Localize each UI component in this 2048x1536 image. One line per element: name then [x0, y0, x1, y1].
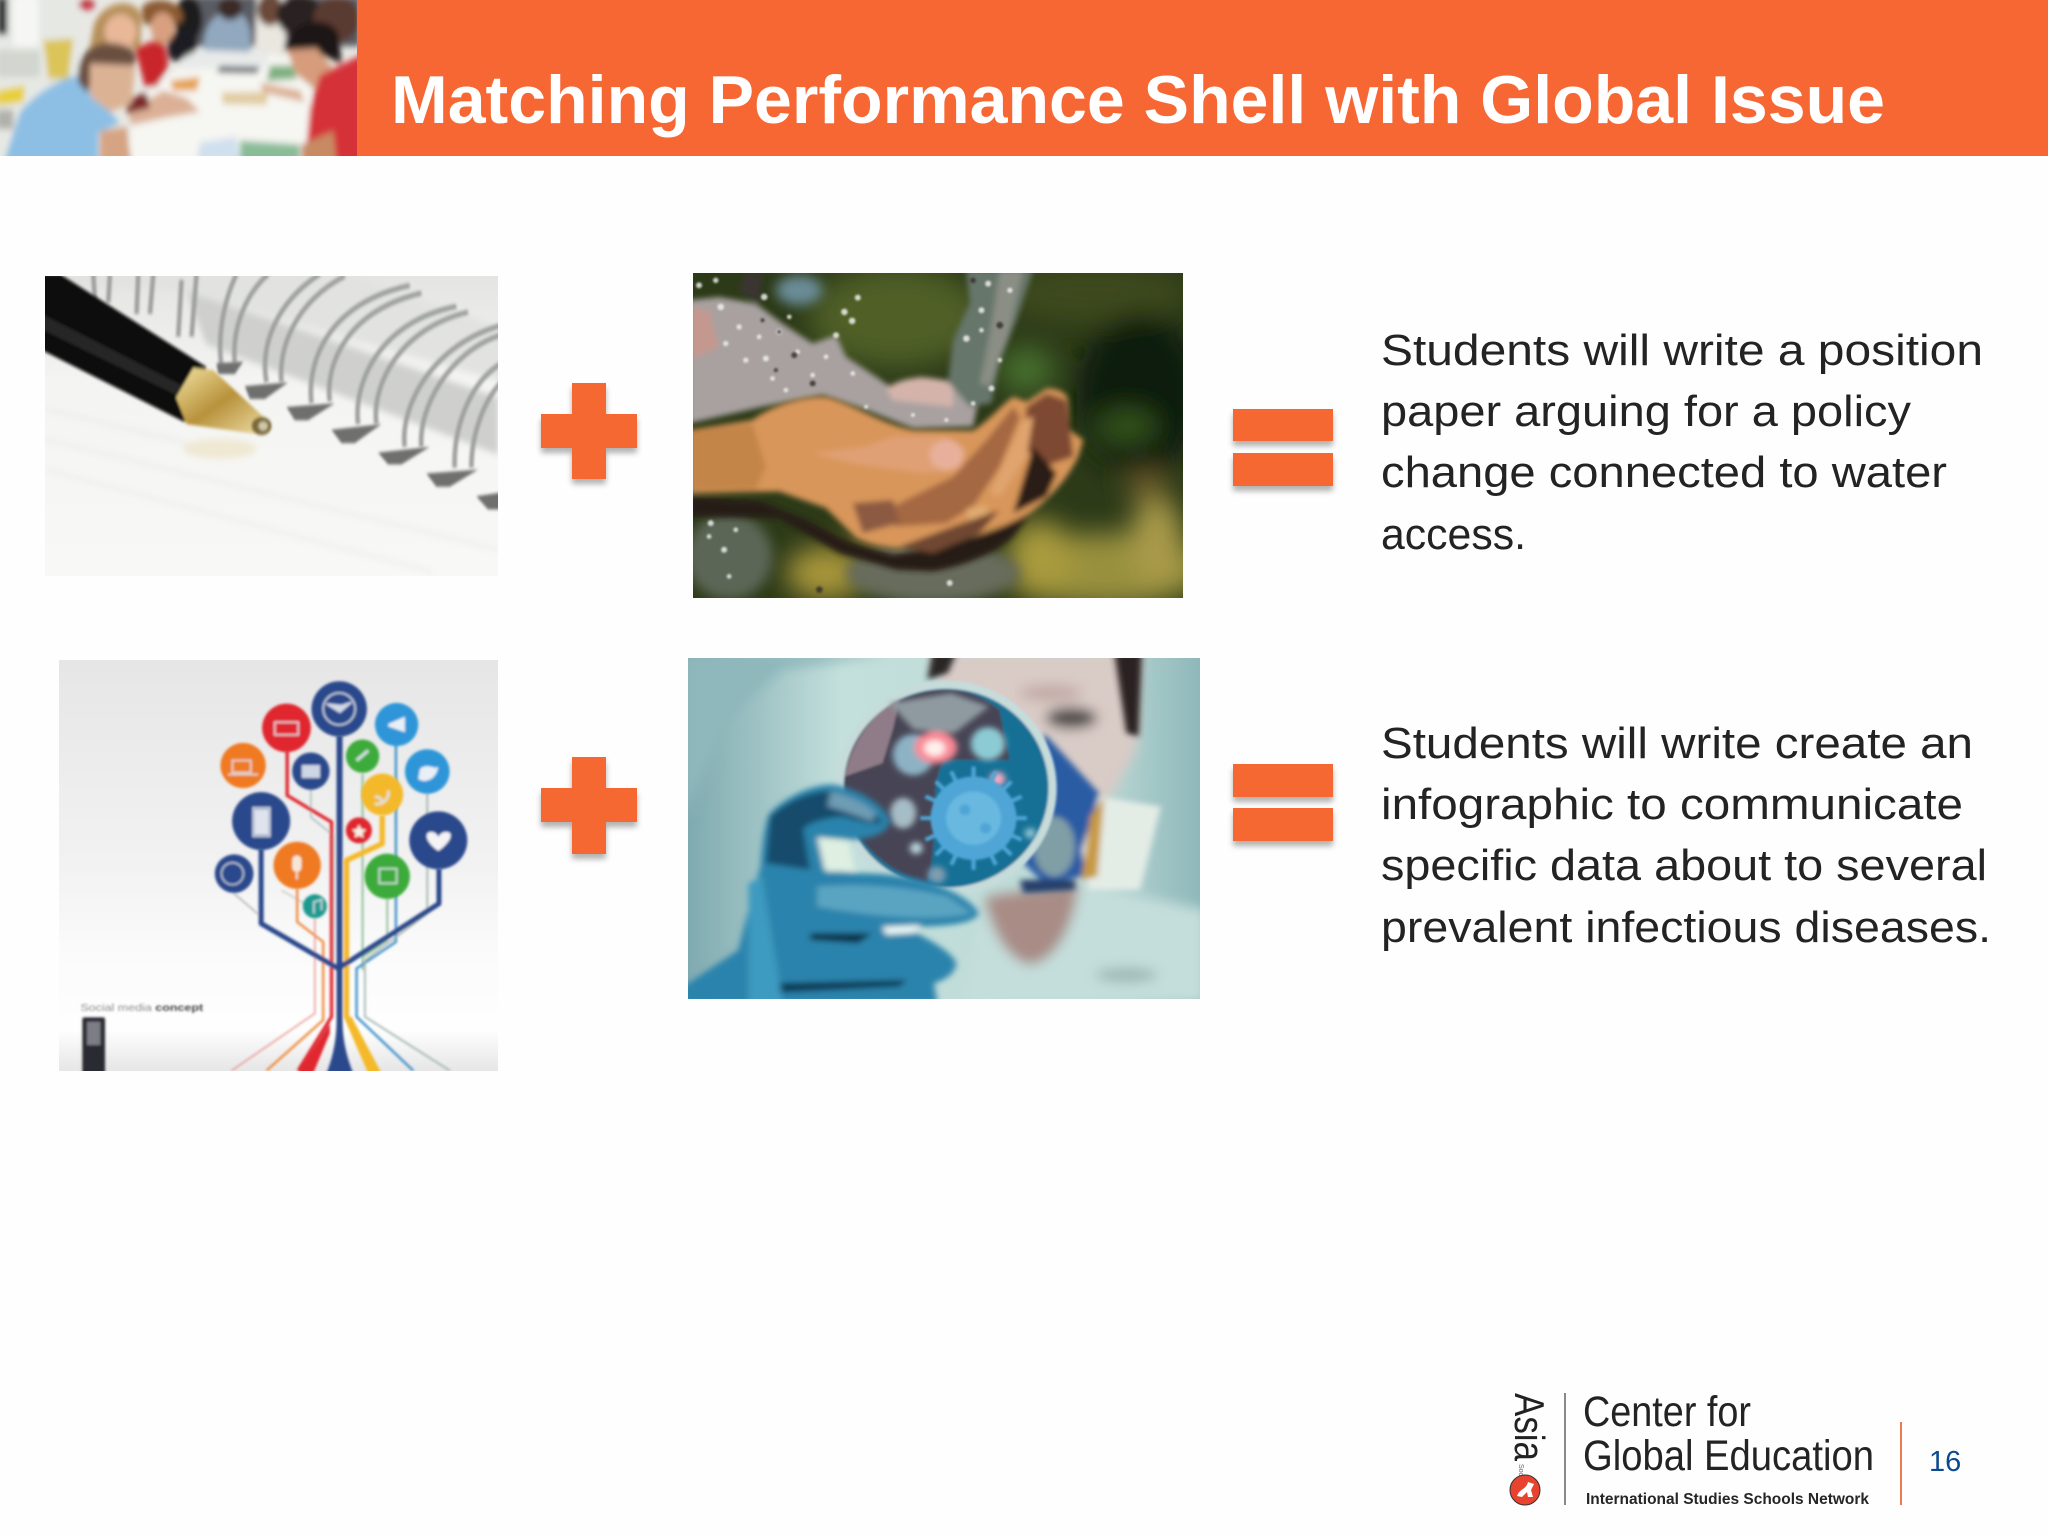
illustration: social media tree: [59, 660, 498, 1071]
text: water access outcome: access.: [1381, 510, 1526, 559]
photo: scientist holding petri dish: [688, 658, 1200, 999]
footer logo: Asia Society Center for Global Education: [1506, 1388, 1874, 1508]
icon: equals sign: [1233, 409, 1333, 486]
icon: book spine: [82, 1017, 105, 1074]
photo: water flowing into cupped hands: [693, 273, 1183, 598]
photo: students working at a table: [0, 0, 357, 156]
photo: pen on spiral notebook: [45, 276, 498, 576]
icon: equals sign: [1233, 764, 1333, 841]
wordmark: Society: Society: [1517, 1464, 1524, 1487]
text: infectious diseases outcome: prevalent infectious diseases.: [1381, 903, 1991, 952]
tagline: International Studies Schools Network: [1586, 1491, 1869, 1508]
wordmark: Center for: Center for: [1583, 1388, 1751, 1436]
icon: red lion seal: [1510, 1475, 1540, 1505]
icon: virus particle: [920, 766, 1027, 870]
icons inside the circles: [221, 693, 397, 914]
caption: social media concept: Social media concept: [80, 1003, 204, 1014]
text: infectious diseases outcome: infographic to communicate: [1381, 780, 1963, 829]
text: water access outcome: [1381, 326, 1983, 559]
title: Matching Performance Shell with Global Issue: [391, 62, 1885, 138]
header band: [0, 0, 2048, 164]
page number: 16: [1929, 1446, 1961, 1478]
icon: plus sign: [541, 757, 637, 854]
text: water access outcome: paper arguing for a policy: [1381, 387, 1911, 436]
text: water access outcome: Students will write a position: [1381, 326, 1983, 375]
wordmark: Asia: Asia: [1506, 1393, 1553, 1462]
text: infectious diseases outcome: specific data about to several: [1381, 841, 1987, 890]
wordmark: Global Education: Global Education: [1583, 1432, 1874, 1480]
text: water access outcome: change connected to water: [1381, 448, 1947, 497]
text: infectious diseases outcome: Students will write create an: [1381, 719, 1973, 768]
text: infectious diseases outcome: [1381, 719, 1991, 952]
icon: plus sign: [541, 383, 637, 479]
gloved hand: [683, 785, 979, 1003]
